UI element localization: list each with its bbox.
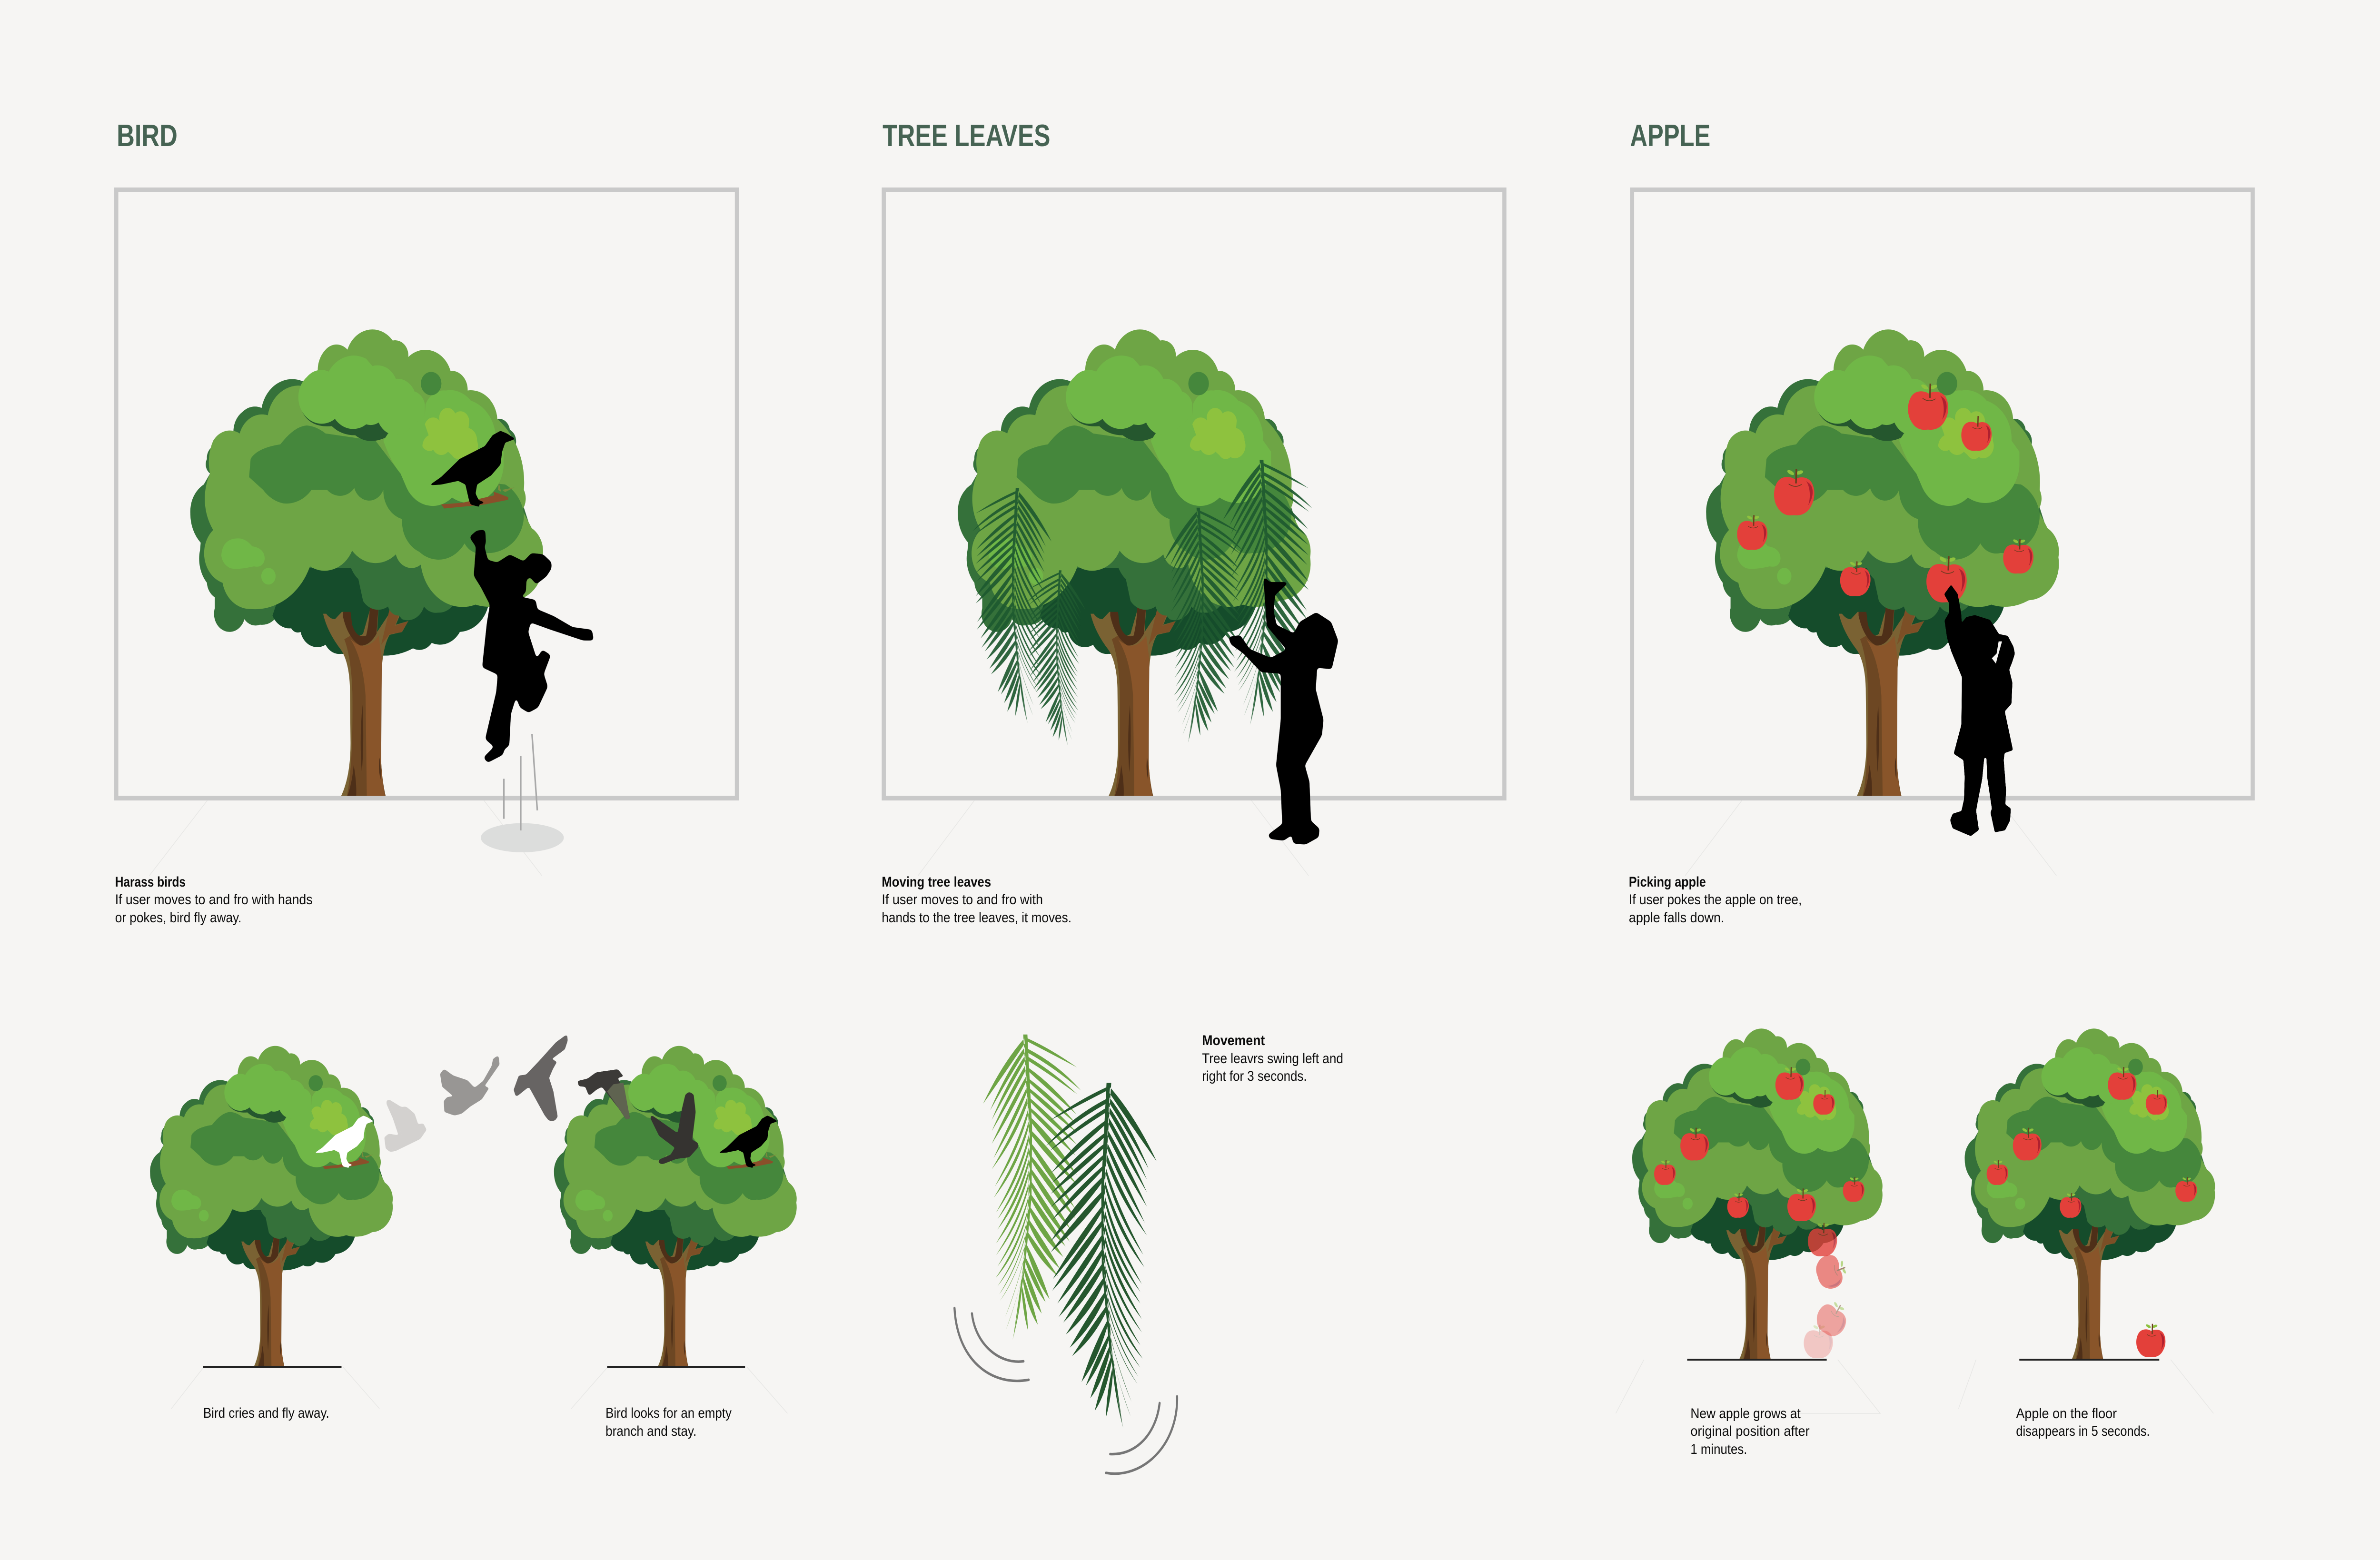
flying birds sequence bbox=[385, 1034, 698, 1165]
dark frond bbox=[1046, 1083, 1157, 1428]
caption: bird cries: Bird cries and fly away. bbox=[203, 1405, 329, 1421]
scene: tree, crow and jumping girl bbox=[190, 329, 593, 852]
caption: moving tree leaves: hands to the tree leaves, it moves. bbox=[882, 909, 1071, 925]
caption: apple disappears: Apple on the floor bbox=[2016, 1405, 2117, 1421]
caption: moving tree leaves: If user moves to and fro with bbox=[882, 891, 1043, 907]
frame: apple stage bbox=[1632, 190, 2253, 798]
falling apple 2 bbox=[1812, 1295, 1852, 1342]
ground line: right tree bbox=[607, 1366, 745, 1368]
jump motion lines bbox=[504, 734, 537, 830]
swing arcs right bbox=[1106, 1396, 1177, 1474]
caption: moving tree leaves: Moving tree leaves bbox=[882, 874, 991, 889]
tree with falling apple bbox=[1632, 1028, 1883, 1360]
ground line: right apple tree bbox=[2019, 1359, 2159, 1361]
swing arcs left bbox=[954, 1308, 1029, 1381]
frond 2 bbox=[1027, 570, 1086, 746]
flying bird 4 tail bbox=[607, 1083, 630, 1119]
light frond bbox=[983, 1035, 1081, 1340]
caption: harass birds bbox=[115, 874, 313, 925]
flying bird 3 bbox=[514, 1034, 567, 1121]
flying bird 1 bbox=[385, 1099, 426, 1152]
caption: new apple grows: original position after bbox=[1690, 1423, 1810, 1439]
title: tree leaves: TREE LEAVES bbox=[883, 118, 1050, 153]
falling apple 3 bbox=[1813, 1250, 1850, 1293]
frame: tree leaves stage bbox=[884, 190, 1504, 798]
caption: picking apple: If user pokes the apple on tree, bbox=[1629, 891, 1802, 907]
flying bird 4 bbox=[577, 1069, 630, 1119]
caption: apple disappears: disappears in 5 seconds. bbox=[2016, 1423, 2150, 1439]
caption: movement: right for 3 seconds. bbox=[1202, 1068, 1307, 1084]
title: bird: BIRD bbox=[117, 118, 178, 153]
panel: tree leaves bbox=[882, 118, 1504, 1474]
caption: bird looks for branch: Bird looks for an empty bbox=[605, 1405, 732, 1421]
flying bird 2 bbox=[440, 1055, 499, 1116]
caption: bird looks for branch bbox=[605, 1405, 732, 1439]
caption: new apple grows bbox=[1690, 1405, 1810, 1457]
falling apple 4 bbox=[1808, 1223, 1837, 1256]
ground line: left apple tree bbox=[1687, 1359, 1827, 1361]
caption: bird looks for branch: branch and stay. bbox=[605, 1423, 696, 1439]
caption: harass birds: If user moves to and fro with hands bbox=[115, 891, 313, 907]
caption: picking apple bbox=[1629, 874, 1802, 925]
girl silhouette jumping bbox=[471, 531, 593, 761]
caption: harass birds: or pokes, bird fly away. bbox=[115, 909, 241, 925]
tree with black bird bbox=[554, 1046, 797, 1367]
girl silhouette reaching up bbox=[1230, 579, 1337, 844]
jump shadow bbox=[481, 823, 564, 852]
hanging palm fronds bbox=[972, 460, 1312, 746]
tree bbox=[958, 329, 1310, 796]
caption: movement bbox=[1202, 1032, 1343, 1084]
caption: movement: Tree leavrs swing left and bbox=[1202, 1050, 1343, 1066]
caption: apple disappears bbox=[2016, 1405, 2150, 1439]
caption: new apple grows: 1 minutes. bbox=[1690, 1441, 1747, 1457]
caption: picking apple: Picking apple bbox=[1629, 874, 1706, 889]
ground line: left tree bbox=[203, 1366, 341, 1368]
apple tree bbox=[1706, 329, 2059, 796]
frond movement diagram bbox=[954, 1035, 1177, 1474]
frond 1 bbox=[972, 488, 1051, 723]
icon: crow on branch bbox=[429, 431, 515, 508]
tree with apple on floor bbox=[1964, 1028, 2215, 1360]
tree bbox=[190, 329, 543, 796]
flying bird 5 bbox=[651, 1092, 698, 1165]
title: apple: APPLE bbox=[1630, 118, 1710, 153]
girl silhouette picking apple bbox=[1945, 586, 2014, 835]
tree with white bird bbox=[150, 1046, 393, 1367]
frame: bird stage bbox=[116, 190, 737, 798]
panel: bird bbox=[115, 118, 797, 1439]
apple on the floor bbox=[2136, 1323, 2165, 1357]
falling apple sequence bbox=[1804, 1223, 1852, 1358]
caption: moving tree leaves bbox=[882, 874, 1071, 925]
frond 3 bbox=[1164, 508, 1243, 743]
falling apple 1 bbox=[1804, 1324, 1833, 1358]
caption: picking apple: apple falls down. bbox=[1629, 909, 1724, 925]
frond 4 bbox=[1223, 460, 1312, 725]
caption: movement: Movement bbox=[1202, 1032, 1265, 1048]
caption: harass birds: Harass birds bbox=[115, 874, 186, 889]
caption: new apple grows: New apple grows at bbox=[1690, 1405, 1801, 1421]
panel: apple bbox=[1629, 118, 2253, 1457]
